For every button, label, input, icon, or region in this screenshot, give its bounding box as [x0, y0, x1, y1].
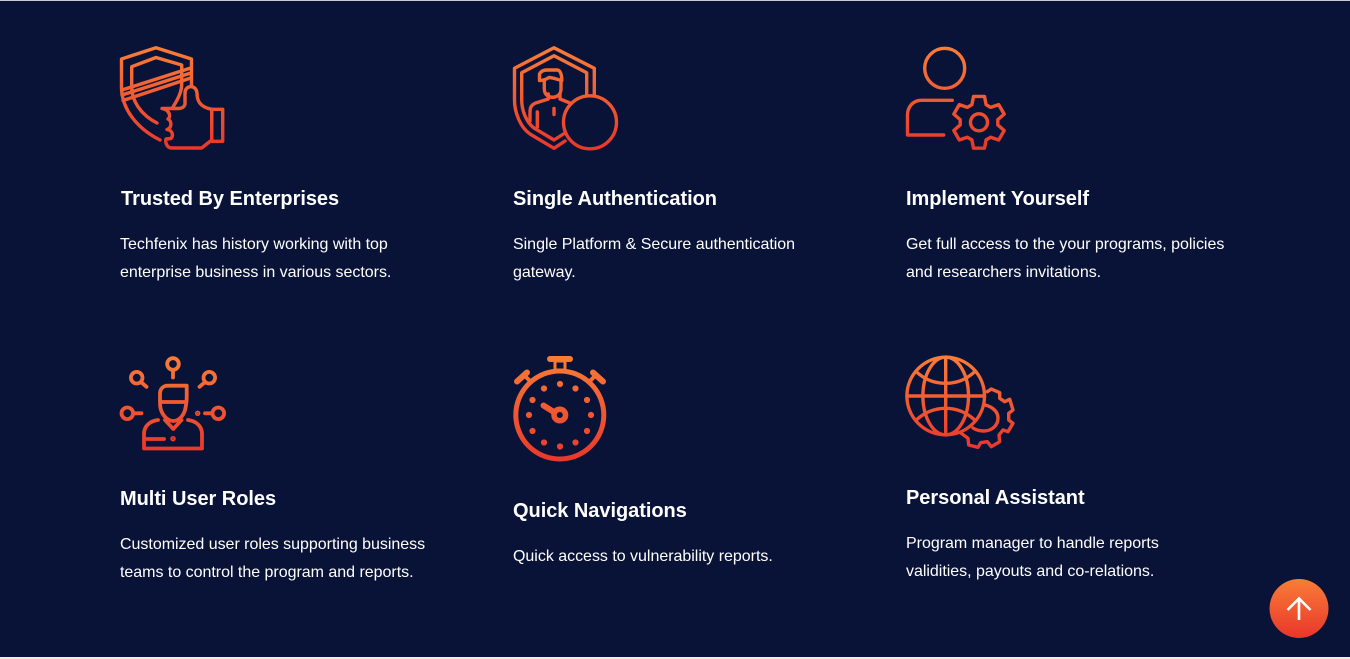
heading: Multi User Roles [120, 488, 276, 510]
description: Program manager to handle reports [906, 535, 1159, 552]
heading: Trusted By Enterprises [121, 188, 339, 210]
description: Customized user roles supporting business [120, 536, 425, 553]
button: scroll to top [1270, 579, 1328, 638]
stopwatch dots [526, 381, 594, 450]
description [513, 236, 795, 281]
icon: stopwatch [516, 359, 604, 459]
feature: Quick Navigations [513, 500, 773, 565]
description [906, 236, 1224, 281]
icon: shield with person and circle [514, 48, 616, 149]
feature: Single Authentication [513, 188, 795, 281]
feature: Trusted By Enterprises [120, 188, 391, 281]
description: Single Platform & Secure authentication [513, 236, 795, 253]
description: Quick access to vulnerability reports. [513, 548, 773, 565]
feature: Multi User Roles [120, 488, 425, 581]
icon: user with role pins [122, 358, 224, 448]
heading: Personal Assistant [906, 487, 1085, 509]
heading: Quick Navigations [513, 500, 687, 522]
description [906, 535, 1159, 580]
icon: globe with gear [907, 357, 1013, 447]
description: enterprise business in various sectors. [120, 264, 391, 281]
description: validities, payouts and co-relations. [906, 563, 1154, 580]
icon: user with gear [908, 48, 1004, 148]
feature: Personal Assistant [906, 487, 1159, 580]
heading: Single Authentication [513, 188, 717, 210]
description: teams to control the program and reports. [120, 564, 414, 581]
description: Techfenix has history working with top [120, 236, 388, 253]
icon: shield with thumbs up [122, 48, 223, 148]
description: gateway. [513, 264, 576, 281]
feature: Implement Yourself [906, 188, 1224, 281]
heading: Implement Yourself [906, 188, 1089, 210]
description: and researchers invitations. [906, 264, 1101, 281]
description [120, 236, 391, 281]
description [120, 536, 425, 581]
description: Get full access to the your programs, policies [906, 236, 1224, 253]
